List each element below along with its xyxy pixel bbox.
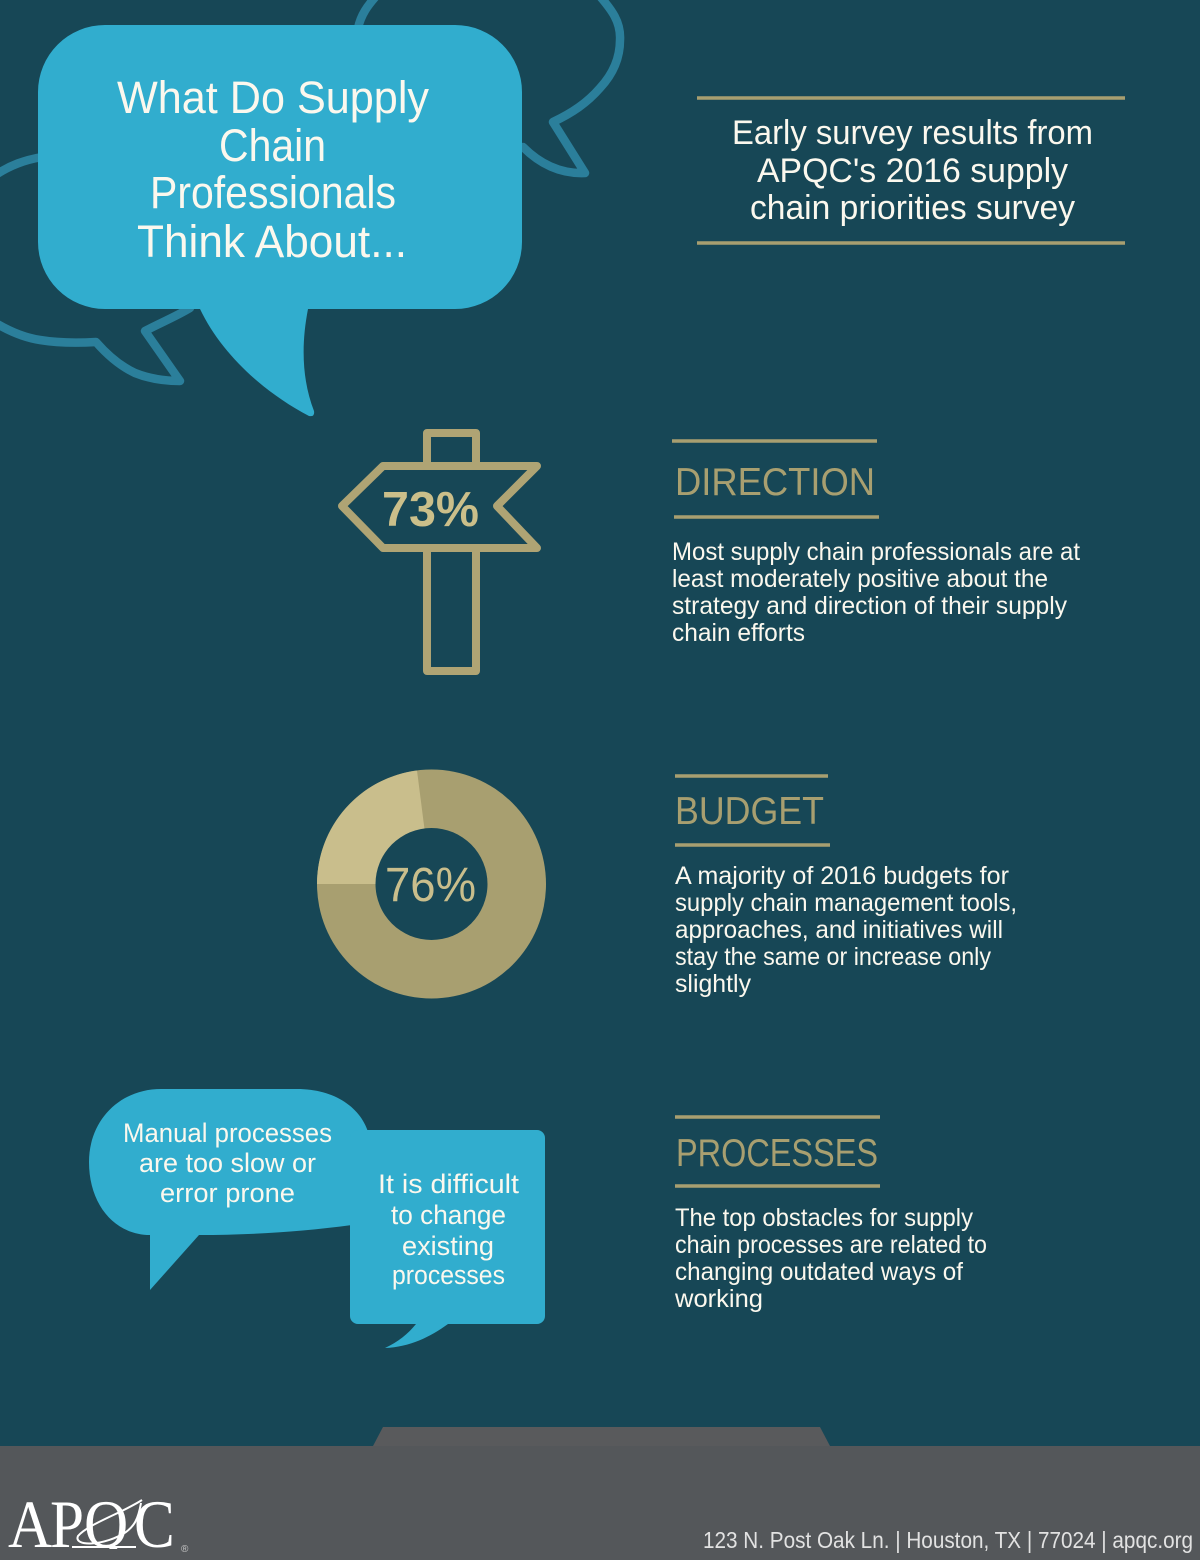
text: budget description: supply chain management tools,: [675, 889, 1017, 917]
heading: processes: PROCESSES: [676, 1132, 878, 1175]
text: processes description: chain processes are related to: [675, 1231, 987, 1259]
text: budget description: stay the same or increase only: [675, 943, 991, 971]
speech bubble: manual processes: error prone: [160, 1178, 295, 1208]
heading: direction: DIRECTION: [675, 461, 875, 504]
text: direction description: strategy and direction of their supply: [672, 592, 1067, 620]
text: direction description: chain efforts: [672, 619, 805, 647]
title: Chain: [219, 120, 326, 171]
speech bubble: difficult to change: processes: [392, 1260, 505, 1290]
title: Professionals: [150, 167, 396, 218]
subtitle block: APQC's 2016 supply: [757, 152, 1068, 190]
title: Think About...: [137, 216, 407, 267]
text: processes description: [674, 1204, 987, 1313]
text: processes description: The top obstacles for supply: [675, 1204, 973, 1232]
main title speech bubble: [38, 25, 522, 416]
text: processes description: working: [674, 1285, 763, 1313]
subtitle block: Early survey results from: [732, 114, 1093, 152]
speech bubble: manual processes: Manual processes: [123, 1118, 332, 1148]
icon: signpost with 73%: 73%: [382, 483, 479, 537]
title: What Do Supply: [117, 72, 429, 123]
text: direction description: Most supply chain professionals are at: [672, 538, 1080, 566]
text: direction description: least moderately positive about the: [672, 565, 1048, 593]
icon: signpost with 73%: [342, 433, 537, 671]
speech bubble: difficult to change: It is difficult: [378, 1169, 520, 1199]
speech bubble: difficult to change: existing: [402, 1231, 494, 1261]
speech bubble: difficult to change: [350, 1130, 545, 1348]
logo: APQC: ®: [181, 1544, 189, 1555]
heading: budget: BUDGET: [675, 790, 824, 833]
chart: donut 76%: [317, 770, 546, 998]
text: budget description: approaches, and initiatives will: [675, 916, 1003, 944]
title: [117, 72, 429, 267]
subtitle block: [697, 98, 1125, 243]
text: processes description: changing outdated ways of: [675, 1258, 963, 1286]
speech bubble: manual processes: are too slow or: [139, 1148, 316, 1178]
section: budget: [675, 776, 1017, 998]
logo: APQC: APQC: [8, 1486, 175, 1560]
footer band: [0, 1427, 1200, 1560]
subtitle block: chain priorities survey: [750, 189, 1075, 227]
chart: donut 76%: 76%: [385, 859, 476, 912]
speech bubble: manual processes: [89, 1089, 369, 1290]
text: budget description: [675, 862, 1017, 998]
section: processes: [674, 1117, 987, 1313]
text: budget description: A majority of 2016 budgets for: [675, 862, 1009, 890]
outline speech bubble: left: [0, 157, 190, 381]
outline speech bubble: top right: [358, 0, 620, 173]
text: direction description: [672, 538, 1080, 647]
speech bubble: difficult to change: to change: [391, 1200, 506, 1230]
text: budget description: slightly: [675, 970, 751, 998]
section: direction: [672, 441, 1080, 647]
